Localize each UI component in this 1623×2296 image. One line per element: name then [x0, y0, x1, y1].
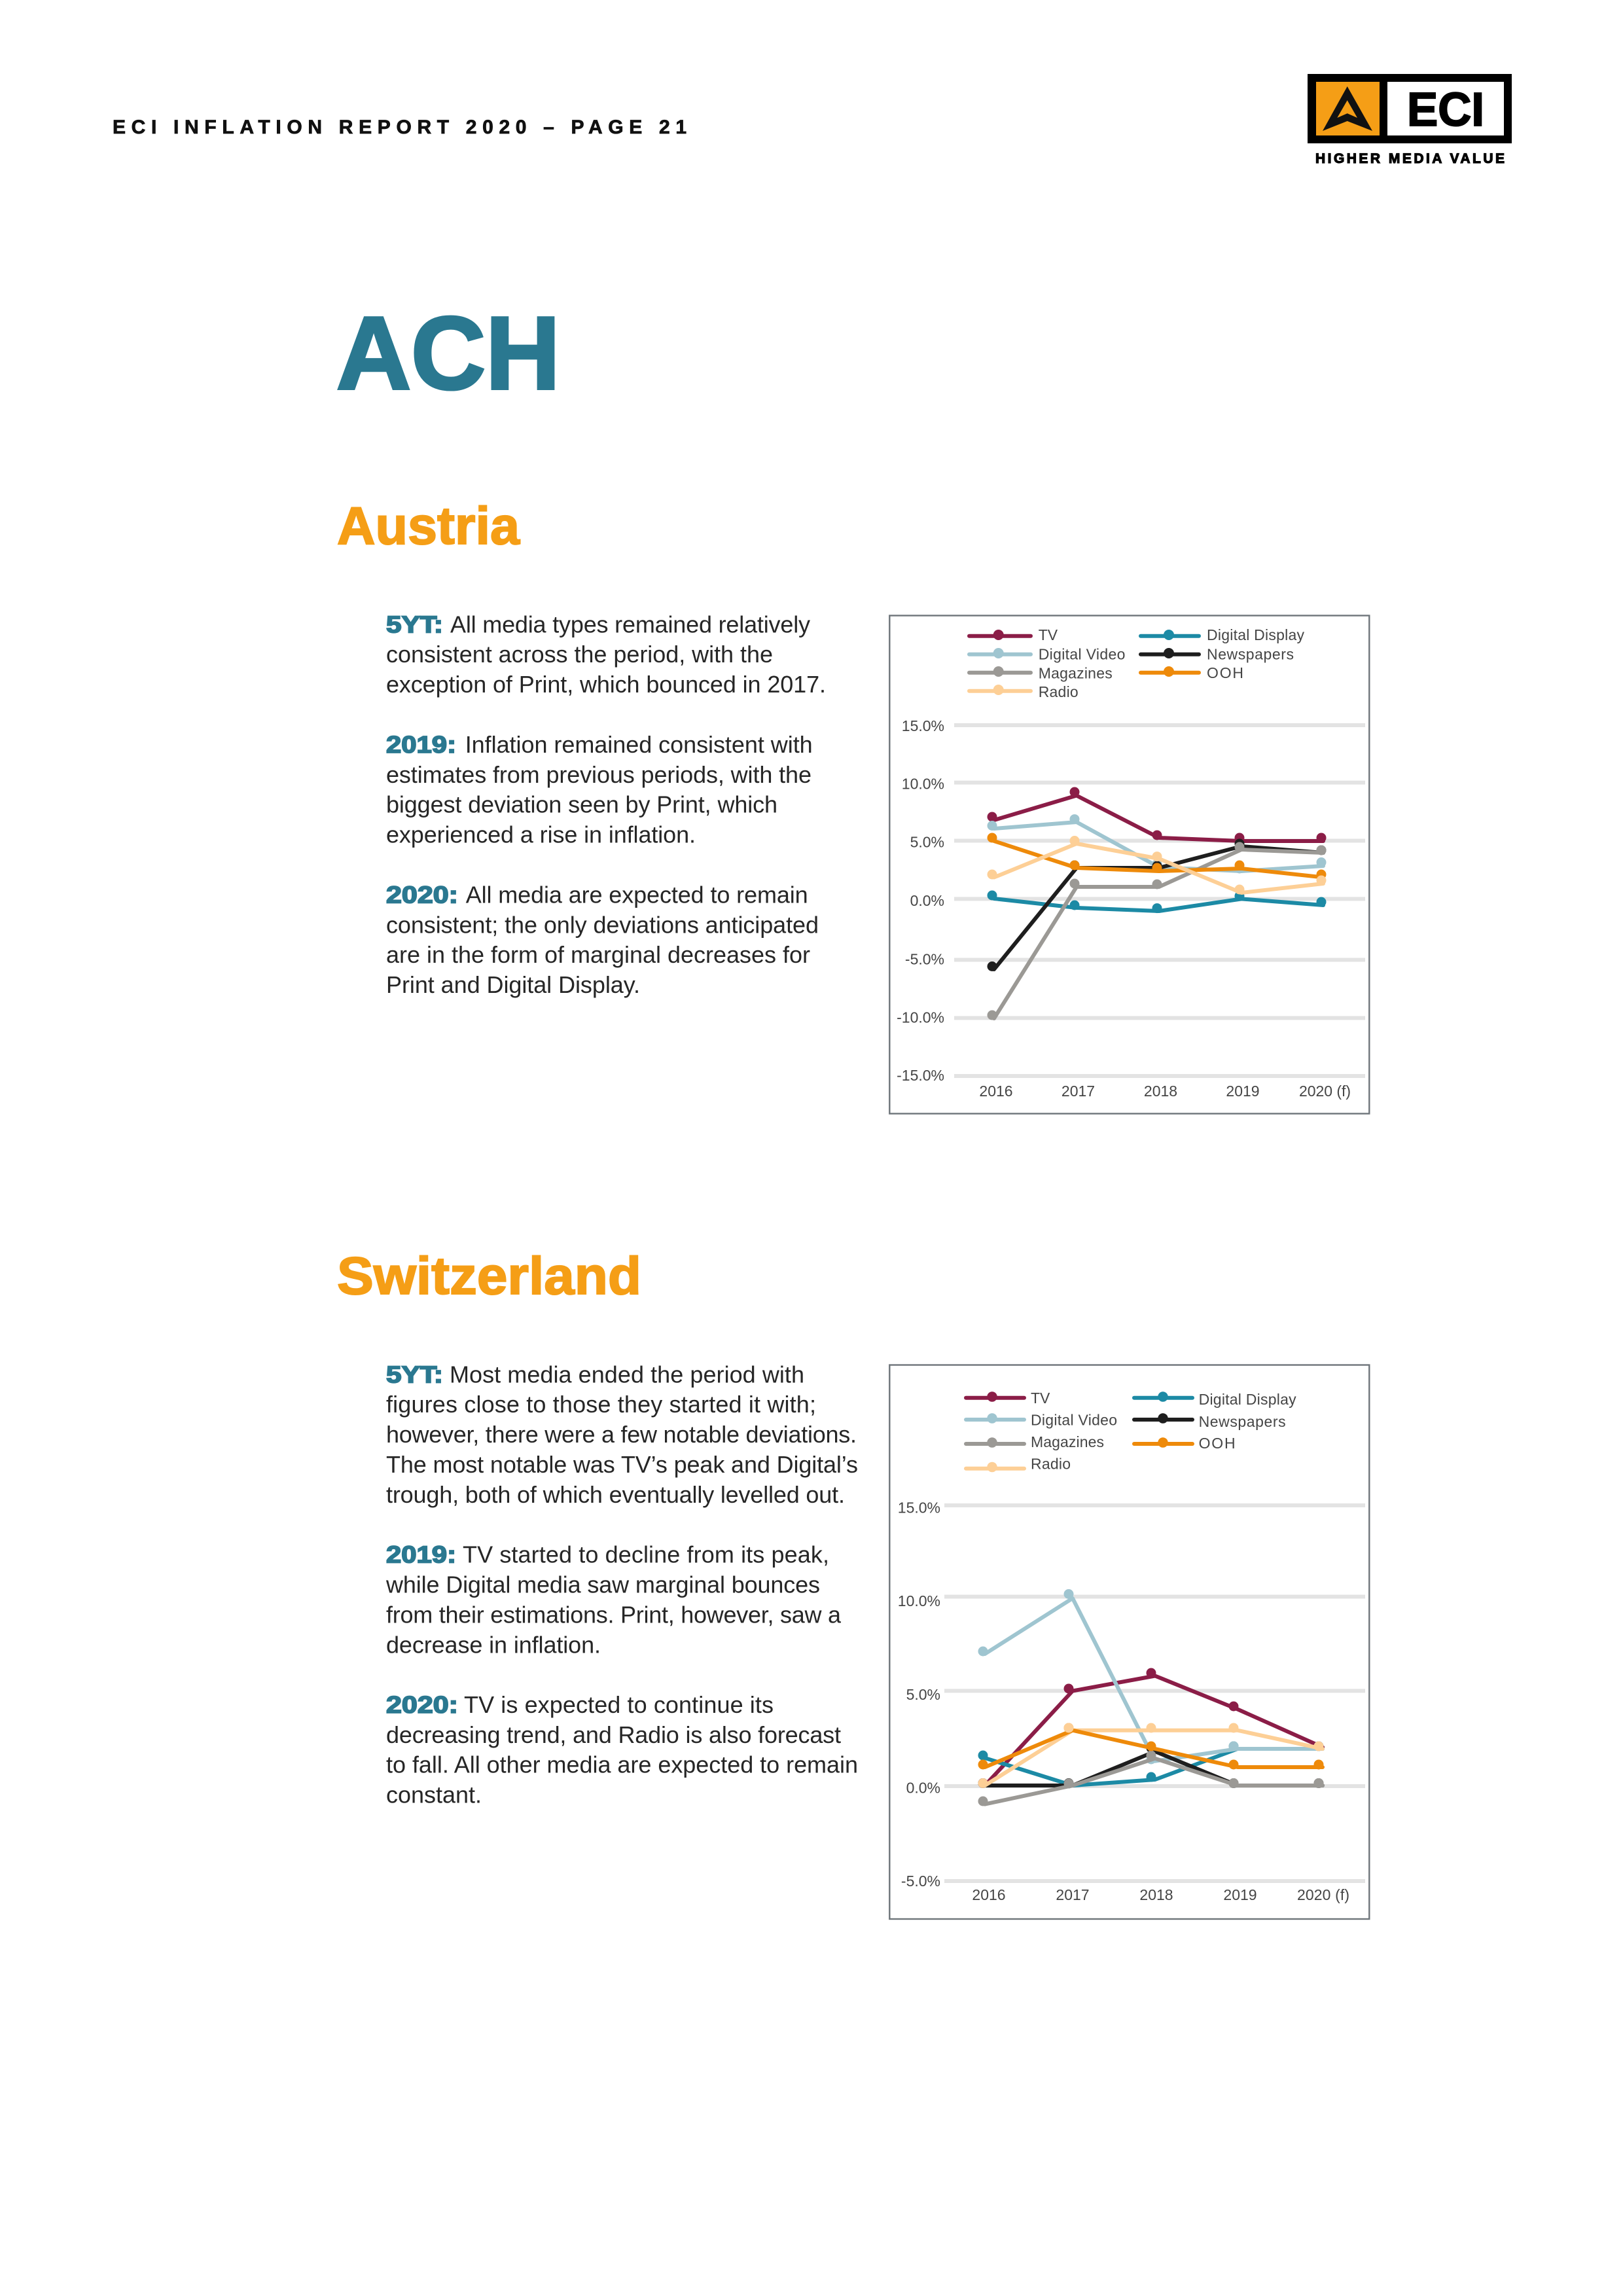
gridlines and y axis: 0.0%	[910, 892, 944, 909]
heading: Switzerland: Switzerland	[337, 1247, 641, 1306]
gridlines and y axis: -5.0%	[905, 950, 944, 967]
gridlines and y axis: 5.0%	[910, 834, 944, 851]
text block: Switzerland commentary: trough, both of which eventually levelled out.	[386, 1481, 845, 1508]
text block: Switzerland commentary: decreasing trend, and Radio is also forecast	[386, 1721, 841, 1748]
logo tagline: HIGHER MEDIA VALUE	[1315, 151, 1505, 166]
legend: Digital Video	[1031, 1412, 1117, 1429]
legend: TV	[1031, 1390, 1050, 1407]
text block: Austria commentary: consistent; the only deviations anticipated	[386, 911, 819, 939]
legend: Digital Display	[1207, 626, 1305, 643]
legend: Magazines	[1039, 665, 1113, 682]
text block: Austria commentary: 5YT:	[386, 611, 443, 637]
panel: Switzerland line chart	[889, 1365, 1369, 1919]
legend: Digital Video	[1039, 646, 1125, 663]
series: Digital Video	[987, 814, 1326, 873]
series: Newspapers	[978, 1743, 1323, 1788]
text block: Austria commentary: All media are expected to remain	[466, 881, 808, 908]
text block: Switzerland commentary: however, there were a few notable deviations.	[386, 1421, 857, 1448]
series: Magazines	[978, 1750, 1323, 1806]
x axis labels: 2018	[1144, 1083, 1177, 1100]
text block: Switzerland commentary: TV started to decline from its peak,	[463, 1541, 829, 1568]
series: Digital Display	[978, 1741, 1323, 1788]
text block: Switzerland commentary	[385, 1361, 858, 1808]
page header: ECI INFLATION REPORT 2020 – PAGE 21	[113, 117, 687, 138]
text block: Switzerland commentary: decrease in inflation.	[386, 1631, 601, 1659]
x axis labels	[979, 1083, 1351, 1100]
text block: Switzerland commentary: TV is expected to continue its	[464, 1691, 774, 1718]
text block: Austria commentary: Inflation remained consistent with	[465, 731, 813, 758]
gridlines and y axis: 15.0%	[898, 1499, 940, 1516]
heading: Austria: Austria	[337, 497, 520, 556]
gridlines and y axis: 10.0%	[898, 1592, 940, 1609]
x axis labels: 2016	[979, 1083, 1013, 1100]
series: TV	[987, 787, 1326, 843]
gridlines and y axis: -10.0%	[897, 1009, 944, 1026]
text block: Switzerland commentary: figures close to those they started it with;	[386, 1391, 816, 1418]
x axis labels: 2019	[1226, 1083, 1260, 1100]
text block: Austria commentary: exception of Print, which bounced in 2017.	[386, 671, 826, 698]
x axis labels: 2020 (f)	[1299, 1083, 1351, 1100]
text block: Switzerland commentary: 2020:	[386, 1691, 458, 1718]
text block: Austria commentary: estimates from previous periods, with the	[386, 761, 812, 788]
text block: Austria commentary: experienced a rise in inflation.	[386, 821, 696, 848]
gridlines and y axis	[898, 1499, 1365, 1890]
legend: Radio	[1031, 1455, 1071, 1472]
text block: Austria commentary: biggest deviation seen by Print, which	[386, 791, 777, 818]
series: Newspapers	[987, 839, 1326, 971]
series: Digital Video	[978, 1589, 1323, 1765]
gridlines and y axis: 10.0%	[902, 776, 944, 793]
series: TV	[978, 1668, 1323, 1788]
x axis labels: 2018	[1139, 1886, 1173, 1903]
text block: Switzerland commentary: Most media ended the period with	[450, 1361, 804, 1388]
legend: Newspapers	[1199, 1413, 1286, 1430]
gridlines and y axis: 5.0%	[906, 1686, 940, 1703]
icon: arrow	[1323, 86, 1372, 131]
legend: Digital Display	[1199, 1391, 1296, 1408]
legend: OOH	[1199, 1435, 1236, 1452]
gridlines and y axis: 0.0%	[906, 1779, 940, 1796]
x axis labels: 2017	[1061, 1083, 1095, 1100]
gridlines and y axis	[897, 717, 1365, 1084]
text block: Switzerland commentary: from their estimations. Print, however, saw a	[386, 1601, 842, 1628]
series: Radio	[985, 1731, 1323, 1785]
text block: Austria commentary: All media types remained relatively	[450, 611, 810, 637]
text block: Austria commentary: Print and Digital Display.	[386, 971, 640, 998]
text block: Switzerland commentary: The most notable was TV’s peak and Digital’s	[386, 1451, 858, 1478]
legend: Newspapers	[1207, 646, 1294, 663]
series markers: Radio	[978, 1723, 1323, 1788]
legend: Radio	[1039, 683, 1079, 700]
x axis labels: 2019	[1223, 1886, 1257, 1903]
legend	[969, 626, 1305, 700]
gridlines and y axis: 15.0%	[902, 717, 944, 734]
text block: Austria commentary: 2019:	[386, 731, 456, 758]
text block: Austria commentary: are in the form of marginal decreases for	[386, 941, 810, 968]
x axis labels: 2017	[1056, 1886, 1090, 1903]
text block: Austria commentary	[386, 611, 826, 998]
text block: Austria commentary: consistent across the period, with the	[386, 641, 773, 668]
legend	[966, 1390, 1296, 1472]
series: Magazines	[987, 842, 1326, 1020]
legend: TV	[1039, 626, 1058, 643]
text block: Switzerland commentary: while Digital media saw marginal bounces	[385, 1571, 820, 1598]
text block: Switzerland commentary: 5YT:	[386, 1361, 443, 1388]
x axis labels: 2020 (f)	[1297, 1886, 1349, 1903]
series: OOH	[978, 1723, 1323, 1770]
text block: Switzerland commentary: to fall. All other media are expected to remain	[386, 1751, 858, 1778]
panel: Austria line chart	[889, 615, 1369, 1114]
series: OOH	[987, 833, 1326, 880]
x axis labels: 2016	[972, 1886, 1006, 1903]
gridlines and y axis: -15.0%	[897, 1067, 944, 1084]
series: Radio	[987, 836, 1326, 894]
x axis labels	[972, 1886, 1349, 1903]
title: ACH	[336, 296, 560, 411]
legend: Magazines	[1031, 1433, 1104, 1450]
legend: OOH	[1207, 664, 1243, 681]
text block: Switzerland commentary: constant.	[386, 1782, 482, 1808]
gridlines and y axis: -5.0%	[901, 1873, 940, 1890]
logo wordmark: ECI	[1407, 84, 1484, 136]
series: Digital Display	[987, 890, 1326, 913]
text block: Austria commentary: 2020:	[386, 881, 458, 908]
logo: ECI Higher Media Value	[1308, 74, 1512, 166]
text block: Switzerland commentary: 2019:	[386, 1541, 456, 1568]
